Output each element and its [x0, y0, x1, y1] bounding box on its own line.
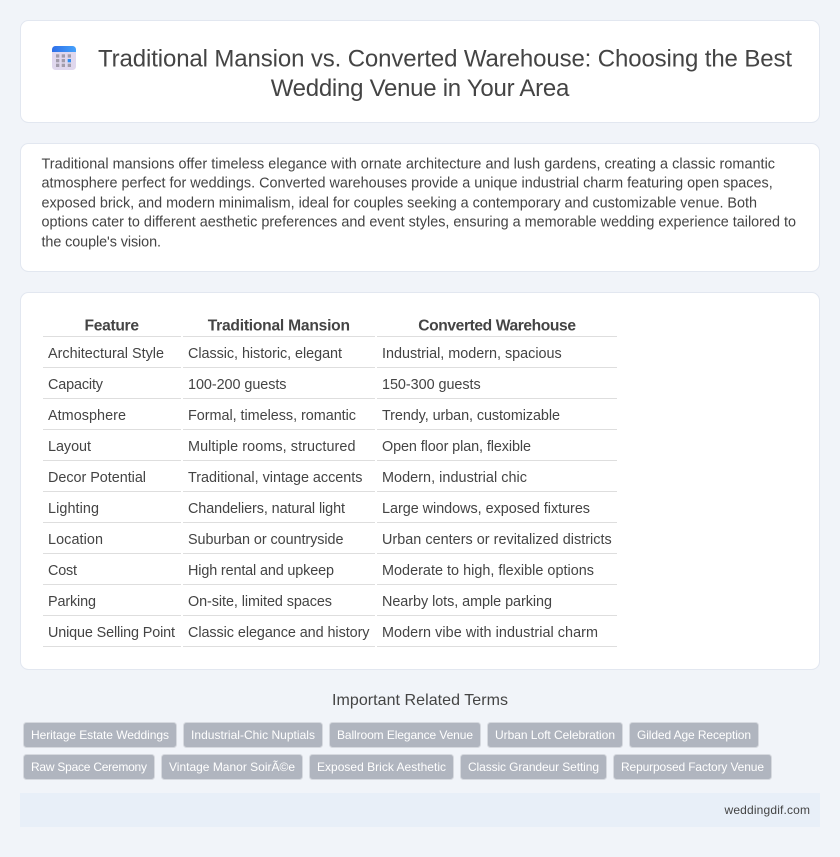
row: cost: Cost — [48, 563, 77, 579]
panel: introduction — [20, 144, 820, 272]
table header row: Feature — [84, 318, 139, 335]
panel: comparison table — [20, 292, 820, 670]
text block: introduction paragraph: Traditional mansions offer timeless elegance with ornate architecture and lush gardens, creating a classic romantic — [42, 156, 775, 172]
footer — [20, 793, 820, 827]
row: decor potential: Traditional, vintage accents — [188, 470, 362, 486]
row: parking: On-site, limited spaces — [188, 594, 332, 610]
panel: related term tags: Ballroom Elegance Venue — [337, 728, 473, 742]
table header row — [84, 318, 576, 335]
row: parking — [48, 594, 552, 610]
panel: related term tags: Raw Space Ceremony — [31, 760, 147, 774]
row: lighting: Lighting — [48, 501, 99, 517]
row: layout: Multiple rooms, structured — [188, 439, 356, 455]
row: parking: Parking — [48, 594, 96, 610]
row: cost: Moderate to high, flexible options — [382, 563, 594, 579]
row: unique selling point: Modern vibe with industrial charm — [382, 625, 598, 641]
row: cost: High rental and upkeep — [188, 563, 334, 579]
row: location — [48, 532, 612, 548]
row: architectural style: Architectural Style — [48, 346, 164, 362]
row: decor potential: Decor Potential — [48, 470, 146, 486]
title: Traditional Mansion vs. Converted Warehouse: Choosing the Best — [98, 46, 792, 73]
heading: related terms: Important Related Terms — [332, 692, 508, 709]
panel: related term tags: Exposed Brick Aesthetic — [317, 760, 446, 774]
panel: related term tags: Gilded Age Reception — [637, 728, 751, 742]
row: atmosphere — [48, 408, 560, 424]
row: capacity: Capacity — [48, 377, 104, 393]
row: location: Location — [48, 532, 103, 548]
row: architectural style — [48, 346, 562, 362]
row: cost — [48, 563, 594, 579]
panel: related term tags: Heritage Estate Weddings — [31, 728, 169, 742]
table header row: Converted Warehouse — [418, 318, 576, 335]
row: layout — [48, 439, 531, 455]
panel: related term tags: Classic Grandeur Setting — [468, 760, 599, 774]
row: capacity — [48, 377, 481, 393]
text block: introduction paragraph: the couple's vision. — [42, 234, 161, 250]
row: capacity: 150-300 guests — [382, 377, 481, 393]
row: lighting: Chandeliers, natural light — [188, 501, 345, 517]
row: architectural style: Industrial, modern, spacious — [382, 346, 562, 362]
panel: related term tags: Repurposed Factory Venue — [621, 760, 764, 774]
row: decor potential: Modern, industrial chic — [382, 470, 527, 486]
footer: weddingdif.com — [724, 803, 810, 817]
panel: related term tags: Urban Loft Celebration — [495, 728, 615, 742]
text block: introduction paragraph: options cater to different aesthetic preferences and event styles, ensuring a memorable wedding experience tailored to — [42, 215, 796, 231]
panel: title card — [20, 20, 820, 122]
title — [98, 46, 792, 102]
row: location: Urban centers or revitalized districts — [382, 532, 612, 548]
row: location: Suburban or countryside — [188, 532, 344, 548]
row: parking: Nearby lots, ample parking — [382, 594, 552, 610]
text block: introduction paragraph: atmosphere perfect for weddings. Converted warehouses provide a unique industrial charm featuring open spaces, — [42, 176, 773, 192]
row: unique selling point — [48, 625, 598, 641]
row: atmosphere: Formal, timeless, romantic — [188, 408, 356, 424]
row: atmosphere: Atmosphere — [48, 408, 126, 424]
icon: calendar — [52, 46, 76, 70]
row: layout: Layout — [48, 439, 91, 455]
row: decor potential — [48, 470, 527, 486]
table header row: Traditional Mansion — [208, 318, 350, 335]
row: capacity: 100-200 guests — [188, 377, 286, 393]
row: atmosphere: Trendy, urban, customizable — [382, 408, 560, 424]
panel: related term tags: Vintage Manor SoirÃ©e — [169, 760, 295, 774]
row: unique selling point: Unique Selling Point — [48, 625, 175, 641]
row: lighting — [48, 501, 590, 517]
text block: introduction paragraph — [42, 156, 796, 250]
row: layout: Open floor plan, flexible — [382, 439, 531, 455]
row: lighting: Large windows, exposed fixtures — [382, 501, 590, 517]
panel: related term tags — [24, 722, 772, 780]
title: Wedding Venue in Your Area — [271, 75, 570, 102]
row: architectural style: Classic, historic, elegant — [188, 346, 342, 362]
panel: related term tags: Industrial-Chic Nuptials — [191, 728, 315, 742]
row: unique selling point: Classic elegance and history — [188, 625, 370, 641]
text block: introduction paragraph: exposed brick, and modern minimalism, ideal for couples seeking a contemporary and customizable venue. Both — [42, 195, 757, 211]
